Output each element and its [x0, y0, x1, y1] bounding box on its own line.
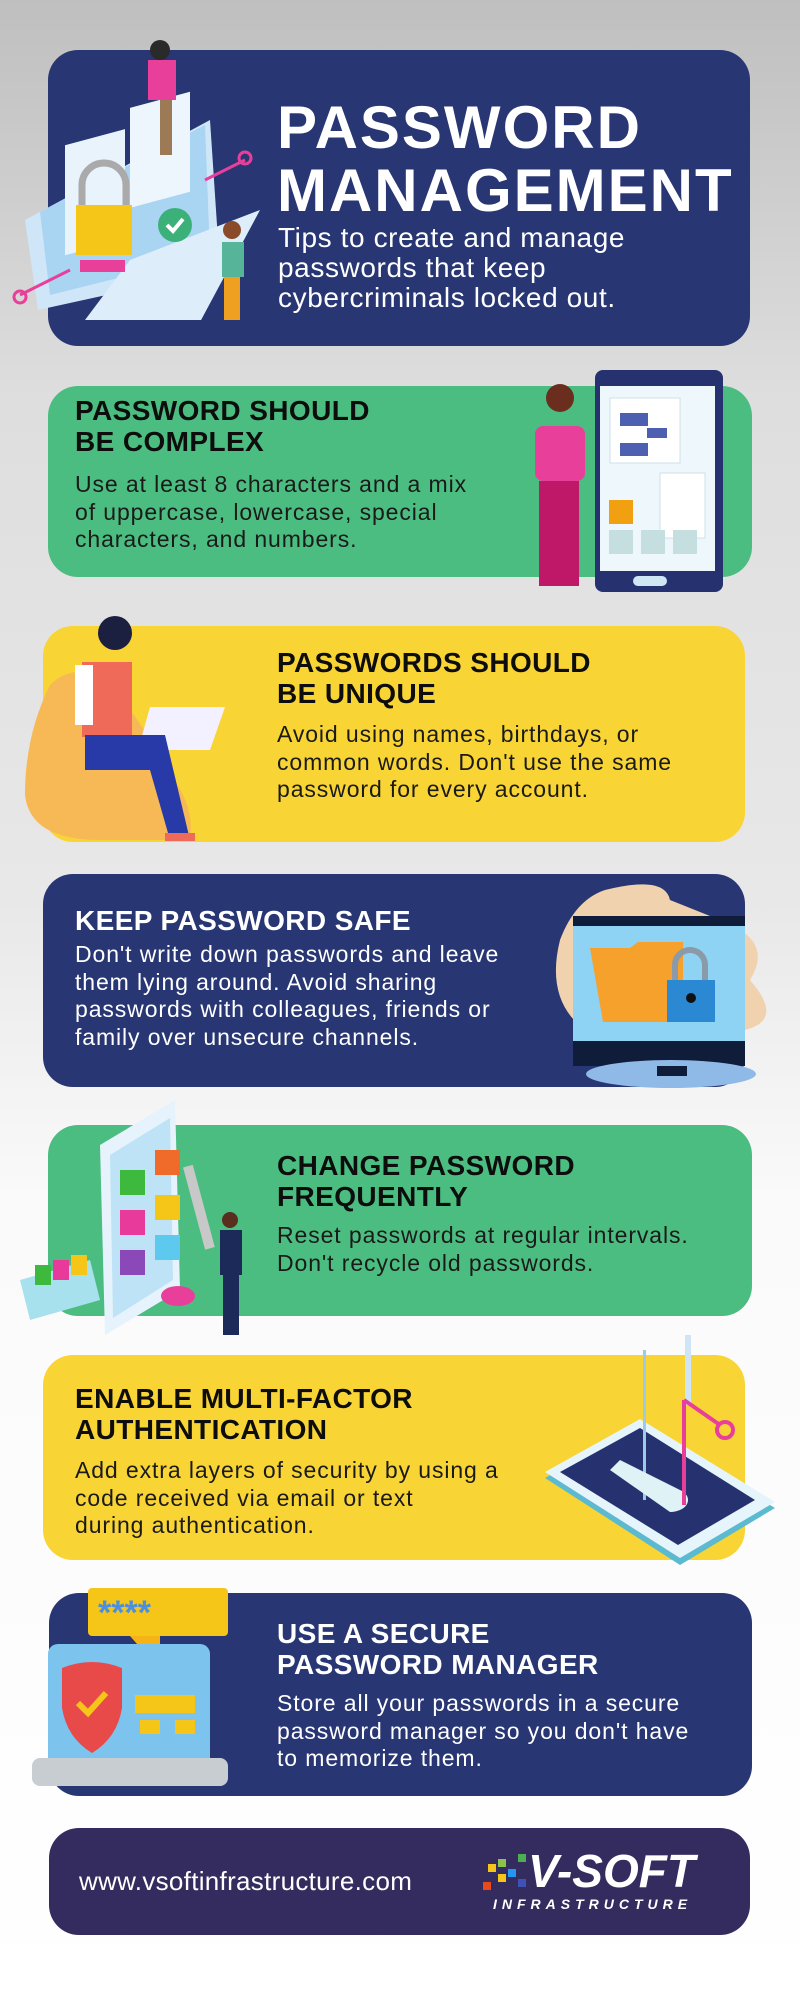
- heading: mfa: AUTHENTICATION: [75, 1414, 327, 1445]
- panel: manager: [49, 1593, 752, 1796]
- heading: frequently: CHANGE PASSWORD: [277, 1150, 575, 1181]
- panel: safe: [43, 874, 745, 1087]
- illustration: phone and woman: [535, 370, 723, 592]
- text: frequently: Reset passwords at regular intervals.: [277, 1222, 689, 1248]
- text: manager: password manager so you don't have: [277, 1718, 689, 1744]
- text: safe: [75, 941, 499, 1050]
- text: complex: characters, and numbers.: [75, 526, 357, 552]
- text: frequently: Don't recycle old passwords.: [277, 1250, 594, 1276]
- illustration: laptop with shield: ****: [98, 1594, 152, 1632]
- panel: footer: [49, 1828, 750, 1935]
- heading: mfa: [75, 1383, 413, 1445]
- text: unique: Avoid using names, birthdays, or: [277, 721, 639, 747]
- illustration: computer with lock: [12, 40, 260, 320]
- text: mfa: during authentication.: [75, 1512, 315, 1538]
- text: mfa: Add extra layers of security by using a: [75, 1457, 499, 1483]
- heading: complex: PASSWORD SHOULD: [75, 395, 370, 426]
- logo: V-SOFT: [528, 1845, 695, 1897]
- panel: frequently: [48, 1125, 752, 1316]
- heading: complex: [75, 395, 370, 457]
- heading: mfa: ENABLE MULTI-FACTOR: [75, 1383, 413, 1414]
- subtitle: cybercriminals locked out.: [278, 282, 616, 313]
- title: MANAGEMENT: [277, 157, 734, 224]
- panel: header: [48, 50, 750, 346]
- panel: complex: [48, 386, 752, 577]
- footer url: www.vsoftinfrastructure.com: [79, 1866, 412, 1896]
- heading: complex: BE COMPLEX: [75, 426, 264, 457]
- text: complex: Use at least 8 characters and a mix: [75, 471, 467, 497]
- logo: INFRASTRUCTURE: [493, 1896, 692, 1912]
- heading: manager: [277, 1618, 599, 1680]
- illustration: monitor with folder lock: [556, 884, 766, 1088]
- heading: manager: USE A SECURE: [277, 1618, 490, 1649]
- illustration: person on beanbag: [25, 616, 225, 841]
- panel: unique: [43, 626, 745, 842]
- text: unique: common words. Don't use the same: [277, 748, 672, 774]
- text: unique: [277, 721, 672, 802]
- subtitle: [278, 222, 625, 313]
- heading: unique: [277, 647, 591, 709]
- heading: unique: PASSWORDS SHOULD: [277, 647, 591, 678]
- text: safe: Don't write down passwords and leave: [75, 941, 499, 967]
- title: [277, 94, 734, 224]
- text: safe: them lying around. Avoid sharing: [75, 968, 437, 994]
- text: manager: [277, 1690, 689, 1771]
- illustration: phone with apps and wrench: [20, 1100, 242, 1335]
- text: complex: [75, 471, 467, 552]
- panel: mfa: [43, 1355, 745, 1560]
- heading: safe: KEEP PASSWORD SAFE: [75, 905, 411, 936]
- text: unique: password for every account.: [277, 776, 589, 802]
- text: safe: passwords with colleagues, friends or: [75, 996, 491, 1022]
- heading: unique: BE UNIQUE: [277, 678, 436, 709]
- text: complex: of uppercase, lowercase, special: [75, 498, 437, 524]
- subtitle: Tips to create and manage: [278, 222, 625, 253]
- text: frequently: [277, 1222, 689, 1276]
- illustration: laptop with shield: [32, 1588, 228, 1786]
- text: mfa: [75, 1457, 499, 1538]
- subtitle: passwords that keep: [278, 252, 546, 283]
- logo: [483, 1845, 698, 1912]
- title: PASSWORD: [277, 94, 642, 161]
- illustration: phone with key: [545, 1335, 775, 1565]
- text: manager: to memorize them.: [277, 1745, 483, 1771]
- text: mfa: code received via email or text: [75, 1484, 414, 1510]
- text: safe: family over unsecure channels.: [75, 1024, 419, 1050]
- text: manager: Store all your passwords in a secure: [277, 1690, 680, 1716]
- heading: manager: PASSWORD MANAGER: [277, 1649, 599, 1680]
- heading: frequently: FREQUENTLY: [277, 1181, 468, 1212]
- heading: frequently: [277, 1150, 575, 1212]
